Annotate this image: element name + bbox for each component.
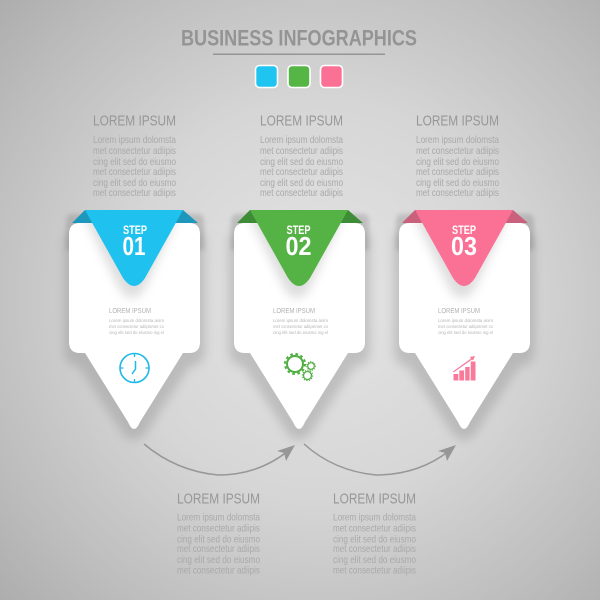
text block: top middle: cing elit sed do eiusmo xyxy=(260,156,343,168)
step 1 text: met consectetur adiipismet co xyxy=(109,324,164,329)
text block: bottom left: LOREM IPSUM xyxy=(177,490,260,508)
title: BUSINESS INFOGRAPHICS xyxy=(181,26,417,50)
step 2 text: LOREM IPSUM xyxy=(273,306,315,315)
step 2 text: met consectetur adiipismet co xyxy=(273,324,328,329)
text block: top left: cing elit sed do eiusmo xyxy=(93,177,176,189)
text block: top middle: cing elit sed do eiusmo xyxy=(260,177,343,189)
icon: clock xyxy=(120,354,149,382)
text block: top left: met consectetur adiipis xyxy=(93,166,176,178)
text block: top left: met consectetur adiipis xyxy=(93,145,176,157)
step 3 text: Lorem ipsum dolomsta anim xyxy=(438,318,493,323)
text block: top middle: Lorem ipsum dolomsta xyxy=(260,134,343,146)
text block: top middle: met consectetur adiipis xyxy=(260,166,343,178)
text block: top right: Lorem ipsum dolomsta xyxy=(416,134,499,146)
text block: top right: met consectetur adiipis xyxy=(416,166,499,178)
ribbon: step 2 xyxy=(250,210,348,286)
step 1 number: 01 xyxy=(122,233,146,261)
text block: top right: cing elit sed do eiusmo xyxy=(416,156,499,168)
text block: top right: met consectetur adiipis xyxy=(416,145,499,157)
ribbon: step 3 xyxy=(415,210,513,286)
step 1 text: cing elit sed do eiusmo ing el xyxy=(109,330,164,335)
step 1 text: LOREM IPSUM xyxy=(109,306,151,315)
text block: top middle: met consectetur adiipis xyxy=(260,187,343,199)
step 2 text xyxy=(273,306,328,335)
title underline xyxy=(213,54,385,55)
text block: bottom left: cing elit sed do eiusmo xyxy=(177,534,260,546)
panel: step 3 card xyxy=(394,210,535,440)
text block: bottom right: met consectetur adiipis xyxy=(333,543,416,555)
text block: top middle: met consectetur adiipis xyxy=(260,145,343,157)
text block: bottom right: cing elit sed do eiusmo xyxy=(333,554,416,566)
step 3 text xyxy=(438,306,493,335)
step 1 text: Lorem ipsum dolomsta anim xyxy=(109,318,164,323)
text block: bottom left xyxy=(177,490,260,576)
step 1 label: STEP xyxy=(123,225,147,237)
text block: top left xyxy=(93,112,176,199)
step 2 text: Lorem ipsum dolomsta anim xyxy=(273,318,328,323)
text block: bottom right xyxy=(333,490,416,576)
text block: bottom right: met consectetur adiipis xyxy=(333,522,416,534)
text block: bottom left: met consectetur adiipis xyxy=(177,564,260,576)
panel: step 2 card xyxy=(229,210,370,440)
text block: top left: Lorem ipsum dolomsta xyxy=(93,134,176,146)
step 2 text: cing elit sed do eiusmo ing el xyxy=(273,330,328,335)
panel: step 1 card xyxy=(64,210,205,440)
text block: top right: LOREM IPSUM xyxy=(416,112,499,130)
text block: top left: LOREM IPSUM xyxy=(93,112,176,130)
text block: top middle xyxy=(260,112,343,199)
text block: bottom left: Lorem ipsum dolomsta xyxy=(177,512,260,524)
text block: bottom left: met consectetur adiipis xyxy=(177,543,260,555)
step 3 text: met consectetur adiipismet co xyxy=(438,324,493,329)
text block: bottom left: cing elit sed do eiusmo xyxy=(177,554,260,566)
text block: top left: cing elit sed do eiusmo xyxy=(93,156,176,168)
ribbon: step 1 xyxy=(85,210,183,286)
step 2 number: 02 xyxy=(286,233,312,261)
text block: bottom right: LOREM IPSUM xyxy=(333,490,416,508)
text block: top right: cing elit sed do eiusmo xyxy=(416,177,499,189)
step 1 text xyxy=(109,306,164,335)
text block: top right: met consectetur adiipis xyxy=(416,187,499,199)
text block: top left: met consectetur adiipis xyxy=(93,187,176,199)
step 3 number: 03 xyxy=(451,233,477,261)
text block: top middle: LOREM IPSUM xyxy=(260,112,343,130)
step 3 text: LOREM IPSUM xyxy=(438,306,480,315)
icon: gears xyxy=(285,354,315,381)
text block: top right xyxy=(416,112,499,199)
text block: bottom right: cing elit sed do eiusmo xyxy=(333,534,416,546)
text block: bottom left: met consectetur adiipis xyxy=(177,522,260,534)
step 2 label: STEP xyxy=(286,225,311,237)
arrow: step 1 to step 2 xyxy=(144,444,295,475)
arrow: step 2 to step 3 xyxy=(304,444,456,475)
text block: bottom right: Lorem ipsum dolomsta xyxy=(333,512,416,524)
step 3 label: STEP xyxy=(452,225,476,237)
step 3 text: cing elit sed do eiusmo ing el xyxy=(438,330,493,335)
icon: bar chart xyxy=(453,356,476,380)
text block: bottom right: met consectetur adiipis xyxy=(333,564,416,576)
legend: colour swatches xyxy=(256,66,342,88)
